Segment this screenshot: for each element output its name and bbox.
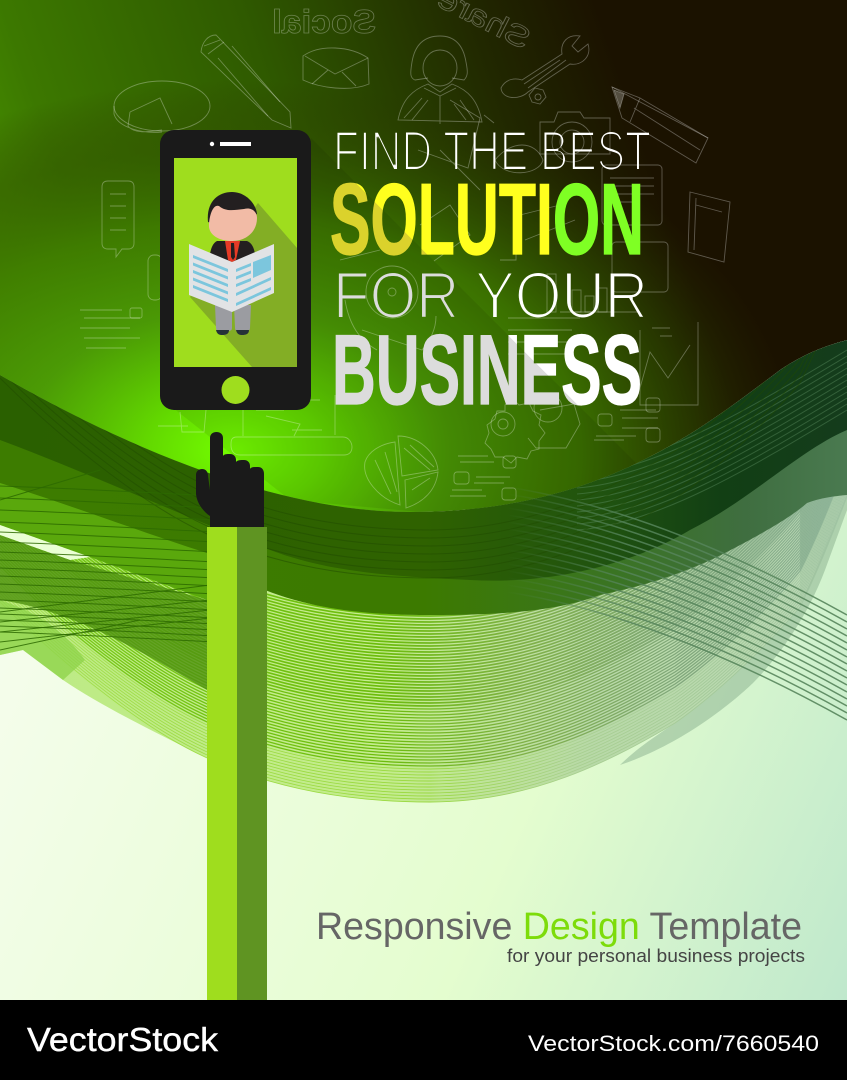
doodle: bar chart: [508, 274, 640, 354]
ribbon: pale highlight strip: [0, 525, 90, 560]
newspaper: [189, 244, 274, 312]
red tie: [225, 241, 240, 262]
ribbon: bottom light patch: [0, 600, 85, 680]
newspaper print: [193, 255, 271, 306]
arm light side: [207, 527, 237, 1000]
doodle: list bottom: [450, 456, 516, 500]
person reading newspaper: [189, 192, 297, 367]
dark arcs in band: [0, 350, 816, 578]
inner dense wave lines: [29, 340, 847, 707]
footer brand: VectorStock: [27, 1021, 219, 1058]
striped green wave: [0, 311, 847, 802]
outer translucent ribbon right: [620, 495, 847, 765]
face: [209, 206, 257, 241]
footer bar: [0, 1000, 847, 1080]
middle wave lines: [0, 496, 834, 767]
hair: [208, 192, 257, 230]
pointing hand: [196, 432, 264, 527]
long shadow: [190, 203, 297, 367]
doodle: pie chart top left: [114, 81, 210, 132]
outer thin wave lines: [0, 464, 847, 802]
doodle: big pencil right: [612, 87, 708, 163]
wave band: dark top: [0, 340, 847, 581]
doodle: sketches behind business: [418, 100, 575, 261]
phone body: [160, 130, 311, 410]
falling line fan on the right: [507, 487, 847, 720]
phone speaker: [220, 142, 251, 146]
doodle: seal and gauge: [340, 250, 436, 350]
doodle: envelope: [303, 48, 369, 88]
doodle: woman avatar: [398, 36, 482, 124]
phone camera dot: [210, 142, 214, 146]
caption subheading: for your personal business projects: [507, 946, 805, 966]
smartphone: [160, 130, 311, 410]
title line: business: BUSINESS: [332, 314, 642, 425]
curved lines on band right: [577, 350, 847, 530]
caption heading: Responsive Design Template: [316, 906, 802, 948]
title line: for your: FOR YOUR: [333, 258, 648, 332]
doodle: book: [688, 192, 730, 262]
doodle: list right of gears: [594, 398, 660, 442]
doodle: line graph right: [640, 322, 698, 405]
doodle: camera: [540, 112, 610, 162]
title: [330, 119, 651, 425]
suit: [210, 241, 255, 262]
title line: solution: SOLUTION: [330, 164, 644, 276]
sketched doodles behind the title: [80, 0, 730, 508]
legs: [215, 305, 232, 331]
dark green glowing upper background: [0, 0, 847, 517]
doodle: gears: [485, 394, 580, 463]
footer background: [0, 1000, 847, 1080]
doodle: pie chart bottom: [365, 436, 438, 508]
horizontal line fan on the left: [0, 470, 215, 650]
doodle: laptop: [158, 390, 352, 455]
wave band: mid tone: [0, 375, 847, 615]
arm dark side: [237, 527, 267, 1000]
translucent ribbons on the left: [0, 470, 265, 690]
doodle: small list left: [80, 255, 162, 348]
wave tint under stripes: [0, 495, 847, 802]
footer image id: VectorStock.com/7660540: [528, 1031, 819, 1056]
title line: find the best: FIND THE BEST: [333, 119, 651, 182]
doodle: speech bubble left: [102, 181, 134, 257]
phone screen: [174, 158, 297, 367]
template caption: [316, 906, 805, 966]
doodle: wrench and nut: [501, 36, 589, 104]
doodle: social word mirrored: Social: [272, 3, 376, 40]
shoes: [216, 330, 249, 335]
raised arm: [207, 527, 267, 1000]
doodle: pencil: [201, 35, 291, 128]
ribbon: lower green: [0, 535, 207, 690]
dark flowing wave band: [0, 340, 847, 615]
ribbon: upper green: [0, 470, 265, 610]
home button: [222, 376, 250, 404]
doodle: tablet with text lines: [602, 165, 668, 292]
